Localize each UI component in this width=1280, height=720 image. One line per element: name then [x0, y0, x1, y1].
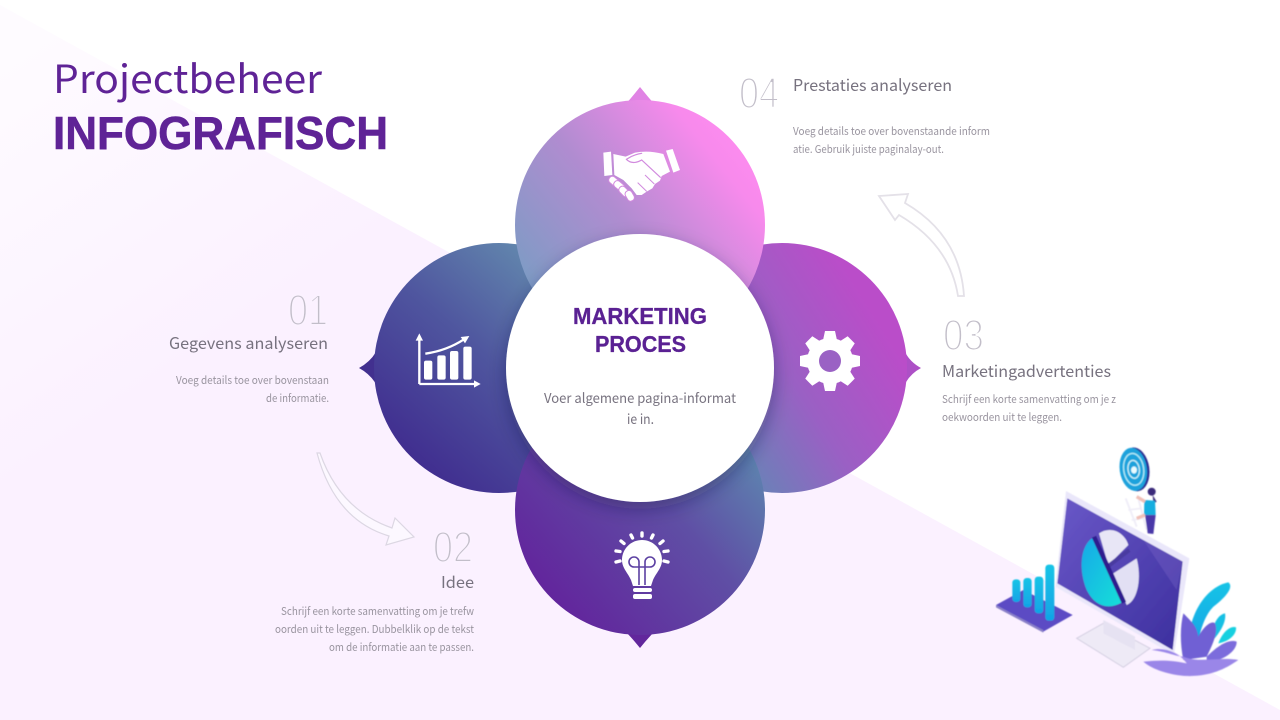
center heading — [573, 303, 707, 357]
title: Projectbeheer — [53, 49, 323, 105]
arrow: step 01 to 02 — [317, 453, 414, 545]
step 03 text: Marketingadvertenties — [942, 358, 1111, 382]
icon: handshake — [603, 149, 680, 202]
step 02 text: Idee — [441, 569, 474, 593]
monitor screen — [1057, 498, 1183, 650]
petal: left, data analysis — [359, 243, 624, 493]
step 02 text — [275, 523, 474, 655]
step 02 text: Schrijf een korte samenvatting om je trefw — [281, 603, 474, 619]
step 01 text: Gegevens analyseren — [169, 330, 328, 354]
monitor stand — [1077, 620, 1150, 667]
step 01 text: 01 — [288, 286, 328, 335]
illustration: monitor with charts — [996, 446, 1238, 676]
bar chart platform — [996, 565, 1073, 633]
center heading: PROCES — [595, 331, 686, 357]
title — [53, 49, 388, 159]
step 02 text: oorden uit te leggen. Dubbelklik op de tekst — [275, 621, 474, 637]
petal: right, marketing ads — [657, 243, 921, 493]
icon: growth chart — [416, 333, 481, 388]
step 01 text — [169, 286, 329, 406]
plant — [1143, 582, 1238, 676]
monitor frame — [1055, 491, 1189, 655]
icon: gear — [800, 331, 860, 391]
petal: top, performance — [515, 87, 765, 350]
step 01 text: de informatie. — [266, 390, 329, 406]
step 02 text: om de informatie aan te passen. — [329, 639, 474, 655]
step 04 text: Voeg details toe over bovenstaande inform — [793, 123, 990, 139]
step 04 text — [739, 69, 990, 157]
step 03 text — [942, 311, 1116, 425]
title: INFOGRAFISCH — [53, 107, 388, 159]
step 02 text: 02 — [433, 523, 473, 572]
step 04 text: 04 — [739, 69, 779, 118]
pie chart — [1082, 530, 1139, 606]
step 03 text: 03 — [943, 311, 984, 360]
center heading: MARKETING — [573, 303, 707, 329]
step 04 text: atie. Gebruik juiste paginalay-out. — [793, 141, 944, 157]
center description — [544, 387, 736, 428]
icon: light bulb — [616, 533, 668, 599]
center description: ie in. — [627, 408, 654, 428]
arrow: step 03 to 04 — [879, 194, 964, 296]
step 03 text: oekwoorden uit te leggen. — [942, 409, 1062, 425]
step 01 text: Voeg details toe over bovenstaan — [176, 372, 329, 388]
center description: Voer algemene pagina-informat — [544, 387, 736, 407]
petal: bottom, idea — [515, 385, 765, 648]
center circle — [506, 234, 774, 502]
step 04 text: Prestaties analyseren — [793, 72, 952, 96]
person with target — [1117, 446, 1157, 534]
step 03 text: Schrijf een korte samenvatting om je z — [942, 391, 1116, 407]
